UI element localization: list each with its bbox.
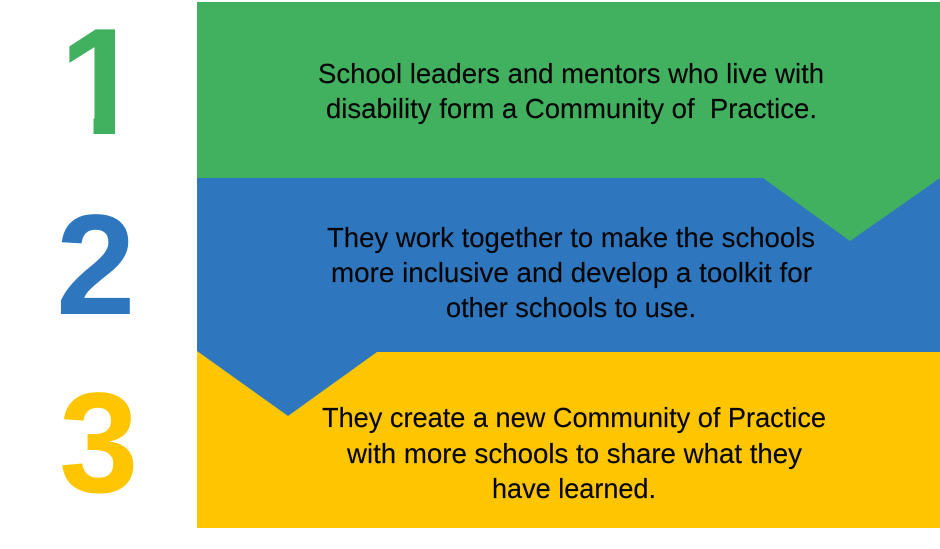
step number 3: 3 [59, 364, 139, 523]
text: step 1: School leaders and mentors who live with [318, 58, 824, 89]
text: step 1 [318, 58, 824, 124]
step number 2: 2 [56, 186, 136, 345]
text: step 3: have learned. [492, 473, 656, 504]
text: step 3: with more schools to share what they [346, 438, 802, 469]
text: step 1: disability form a Community of Practice. [326, 93, 817, 124]
text: step 2: more inclusive and develop a toolkit for [331, 257, 812, 288]
step number 1: 1 [59, 0, 144, 167]
text: step 2 [327, 222, 815, 323]
panel: step 1 green with downward notch [197, 2, 940, 241]
panel: step 2 blue with downward notch [197, 178, 940, 416]
text: step 3: They create a new Community of Practice [322, 402, 826, 433]
text: step 2: other schools to use. [446, 292, 696, 323]
panel: step 3 yellow [197, 351, 940, 528]
text: step 2: They work together to make the schools [327, 222, 815, 253]
text: step 3 [322, 402, 826, 504]
